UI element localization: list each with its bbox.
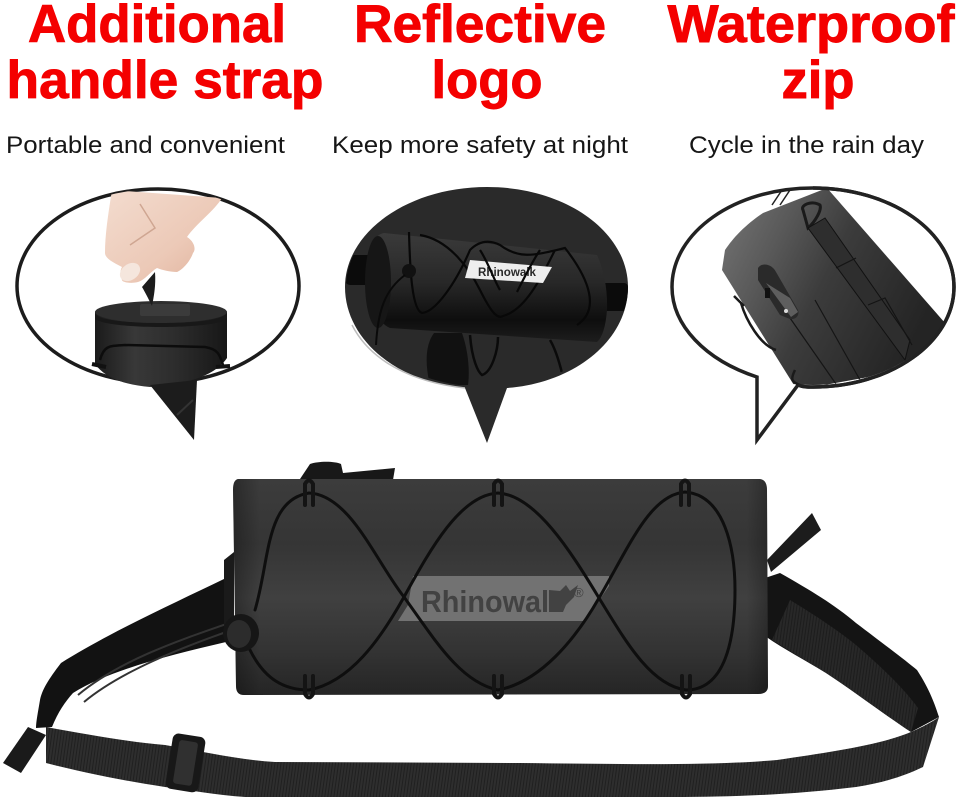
panel: handle strap speech bubble [17,189,299,440]
bubble rim over photo [798,188,954,387]
zip slider slot [758,265,798,319]
registered mark: ® [574,585,584,600]
caption: cycle in the rain day: Cycle in the rain day [689,132,924,159]
slider buckle [165,733,206,793]
reflective white logo band: Rhinowalk [478,265,536,279]
photo: hand pinching tab [105,190,222,306]
heading: additional handle strap [6,0,324,110]
bungee cords [250,492,735,690]
bubble outline [17,189,299,383]
rhinowalk logo text: Rhinowal [421,584,549,619]
top clasp [300,462,395,480]
heading: waterproof zip [668,0,955,110]
reflective logo band [398,576,609,621]
heading: waterproof zip: zip [782,51,854,110]
photo: bag end with pull tab [92,301,230,440]
left strap loop [224,552,234,640]
photo: strap and main bag [3,462,939,797]
rim highlight [352,325,465,388]
bubble shape [345,187,628,443]
bag body [233,479,768,695]
strap: upper right section [765,573,939,732]
reflective white logo band [465,250,552,292]
strap: upper left section [36,578,226,728]
photo: bag on handlebar at night [345,232,628,385]
caption: keep more safety at night: Keep more safety at night [332,132,628,159]
strap: long webbing loop [46,717,939,797]
strap: end tip [3,727,46,773]
cord hooks [305,480,690,698]
rhino logo mark [549,585,578,612]
heading: reflective logo: logo [432,51,542,110]
photo: bag with zip pull [722,188,945,390]
panel: reflective logo speech bubble [345,187,628,443]
heading: additional handle strap: handle strap [6,51,324,110]
side cord toggle [734,296,800,385]
caption: portable and convenient: Portable and convenient [6,132,285,159]
panel: waterproof zip speech bubble [672,188,954,440]
heading: reflective logo [354,0,606,110]
right pull tab [767,513,821,572]
cord lock toggle [223,614,259,652]
bubble outline [672,188,954,440]
